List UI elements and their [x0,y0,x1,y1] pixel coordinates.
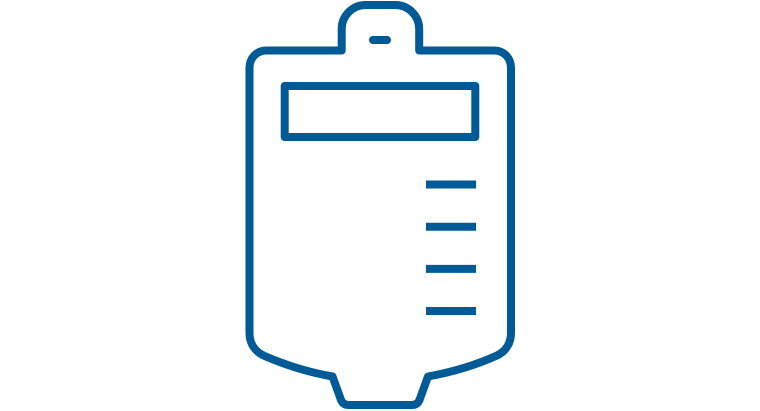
measurement ticks [426,184,476,311]
hanging slot [373,36,387,44]
bag outline [250,5,511,405]
label rectangle [285,86,475,137]
